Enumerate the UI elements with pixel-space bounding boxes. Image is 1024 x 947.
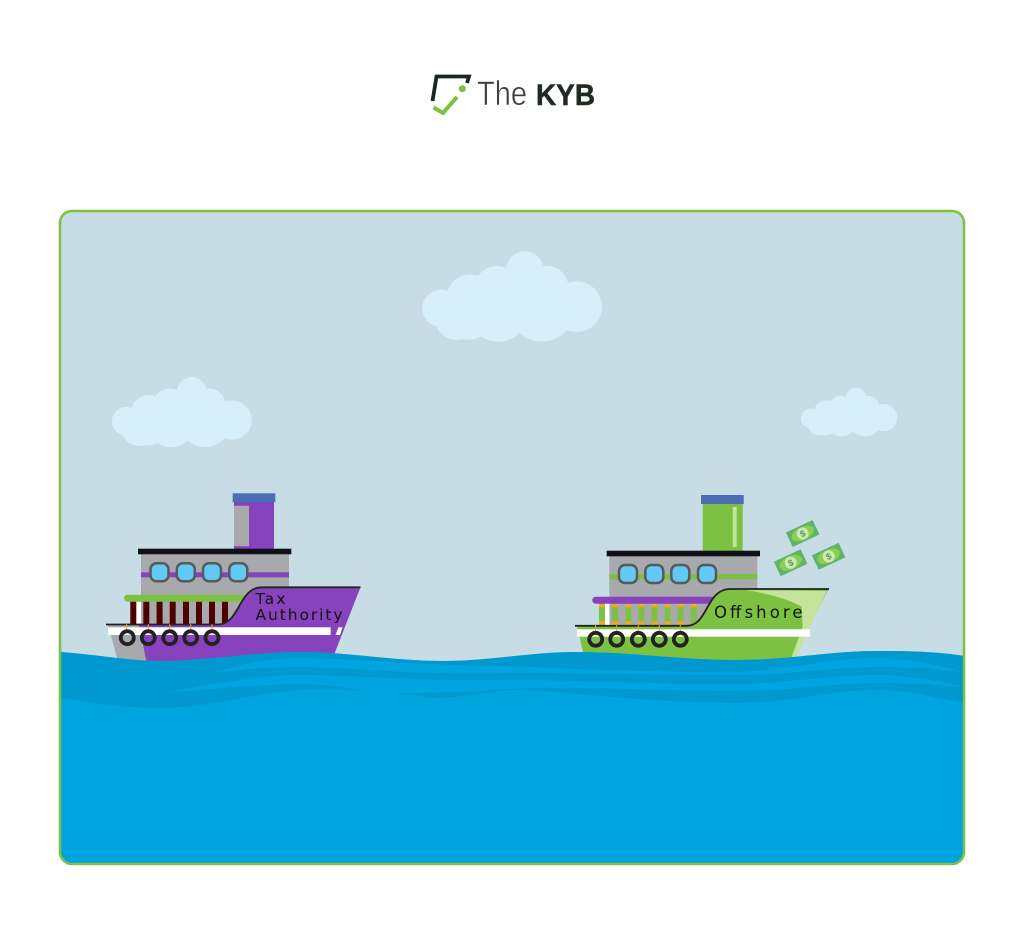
funnel <box>701 495 744 551</box>
deck rail <box>124 595 246 602</box>
deck rail <box>592 597 716 604</box>
bill top: $ <box>798 528 807 539</box>
panel border <box>60 211 964 864</box>
hull label: Tax <box>254 590 286 608</box>
logo wordmark: The <box>477 75 527 113</box>
bill right: $ <box>824 551 833 562</box>
windows <box>150 563 247 581</box>
ship: Tax Authority <box>106 493 360 665</box>
water <box>60 651 964 870</box>
hull label: Offshore <box>714 603 802 622</box>
funnel <box>233 493 275 549</box>
logo wordmark bold: KYB <box>536 79 595 112</box>
windows <box>619 565 716 583</box>
icon: shield check <box>432 76 469 113</box>
tires <box>121 624 218 644</box>
cabin <box>136 549 291 625</box>
light wave stripe lower <box>167 675 964 693</box>
logo <box>432 75 595 113</box>
light wave stripe upper <box>210 658 964 675</box>
sea body <box>60 651 964 870</box>
cloud: large <box>422 251 602 342</box>
cloud: left <box>112 377 252 447</box>
dark wave band <box>60 651 964 708</box>
hull <box>575 589 829 665</box>
cabin <box>604 551 760 626</box>
money bills <box>774 520 845 576</box>
bill left: $ <box>786 557 795 568</box>
hull <box>106 587 360 665</box>
deck posts <box>599 603 697 626</box>
cloud: right <box>801 388 897 436</box>
deck posts <box>130 601 228 625</box>
hull label <box>254 590 342 624</box>
tires <box>589 625 687 646</box>
ship: Offshore <box>575 495 829 665</box>
panel background sky <box>60 211 964 864</box>
hull label: Authority <box>256 606 342 624</box>
panel: sea scene <box>60 211 964 870</box>
